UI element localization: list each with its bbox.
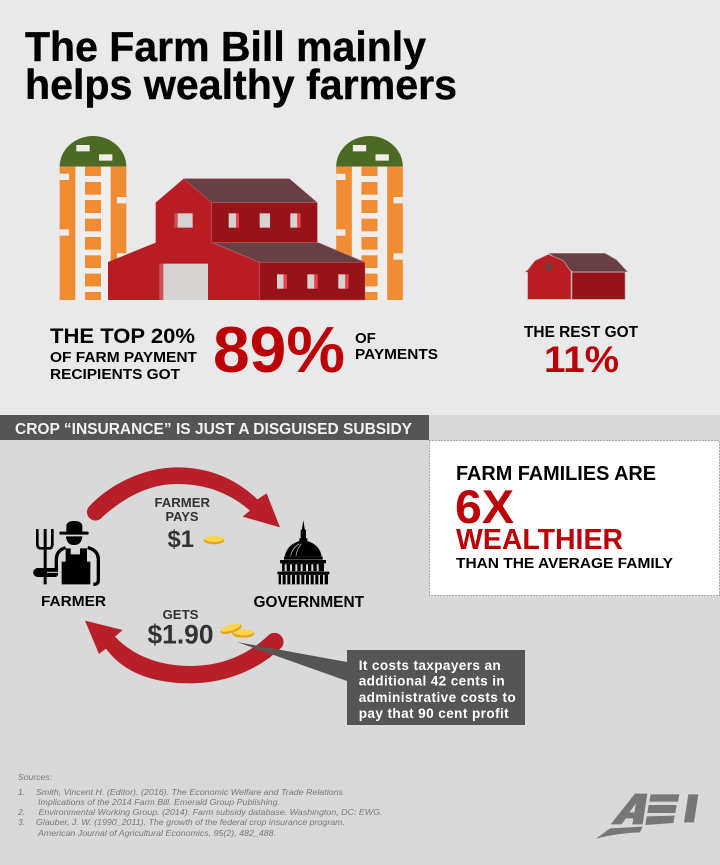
callout: taxpayer administrative costs: It costs taxpayers an <box>359 658 501 673</box>
title: helps wealthy farmers <box>25 61 457 108</box>
icon: farmer <box>33 521 98 584</box>
text: top 20 percent label: RECIPIENTS GOT <box>50 366 181 383</box>
title: The Farm Bill mainly <box>25 23 426 70</box>
text: of payments: PAYMENTS <box>355 346 438 363</box>
callout: taxpayer administrative costs <box>237 642 525 725</box>
logo: AEI <box>596 794 698 839</box>
big number: 89 percent: 89% <box>213 313 345 386</box>
panel: farm families wealth callout: 6X <box>455 481 514 534</box>
text: farmer pays $1: $1 <box>168 526 194 553</box>
text: top 20 percent label: OF FARM PAYMENT <box>50 349 198 366</box>
text: farmer pays $1: FARMER <box>154 495 211 510</box>
callout: taxpayer administrative costs: additional 42 cents in <box>359 674 505 688</box>
text: top 20 percent label: THE TOP 20% <box>50 324 195 348</box>
arrow: farmer pays government <box>87 467 280 527</box>
text: farmer pays $1 <box>154 495 211 553</box>
icon: large farm with silos <box>60 136 403 300</box>
section header band <box>0 415 429 440</box>
panel: farm families wealth callout: WEALTHIER <box>456 524 623 556</box>
icon: small barn <box>525 253 627 299</box>
text: sources: Glauber, J. W. (1990_2011). The growth of the federal crop insurance program. <box>36 817 345 827</box>
panel: farm families wealth callout: FARM FAMILIES ARE <box>456 463 656 485</box>
icon: red barn <box>108 179 365 300</box>
icon: left silo <box>60 136 126 300</box>
label: government: GOVERNMENT <box>254 594 365 611</box>
big number: 11 percent: 11% <box>544 338 619 380</box>
panel: farm families wealth callout <box>430 440 720 596</box>
label: farmer: FARMER <box>41 593 106 610</box>
text: gets $1.90: GETS <box>162 607 199 622</box>
panel: farm families wealth callout: THAN THE AVERAGE FAMILY <box>456 555 673 572</box>
text: gets $1.90: $1.90 <box>148 620 214 650</box>
icon: right silo <box>336 136 403 300</box>
text: sources: 1. <box>18 787 25 797</box>
icon: capitol building <box>277 520 329 584</box>
text: farmer pays $1: PAYS <box>166 509 199 524</box>
text: sources: Sources: <box>18 772 53 782</box>
text: of payments <box>355 330 438 363</box>
text: of payments: OF <box>355 330 376 347</box>
text: sources <box>17 772 382 838</box>
text: sources: Smith, Vincent H. (Editor). (2016). The Economic Welfare and Trade Relations <box>36 787 344 797</box>
icon part: hat and head <box>59 521 89 545</box>
callout: taxpayer administrative costs: pay that 90 cent profit <box>359 706 509 721</box>
icon part: overalls <box>47 548 98 584</box>
icon: two coins <box>219 622 254 638</box>
text: the rest got: THE REST GOT <box>524 324 638 341</box>
text: top 20 percent label <box>50 324 198 383</box>
title <box>25 23 457 108</box>
icon: single coin <box>204 536 224 544</box>
callout: taxpayer administrative costs: administrative costs to <box>359 690 516 705</box>
text: sources: 3. <box>18 817 25 827</box>
arrow: government pays farmer <box>85 621 283 683</box>
section header band: CROP “INSURANCE” IS JUST A DISGUISED SUBSIDY <box>15 421 412 438</box>
text: sources: American Journal of Agricultural Economics, 95(2), 482_488. <box>37 828 276 838</box>
icon part: pitchfork <box>33 529 57 584</box>
text: sources: 2. <box>17 807 25 817</box>
text: sources: Environmental Working Group. (2014). Farm subsidy database. Washington, DC: EWG. <box>38 807 382 817</box>
text: sources: Implications of the 2014 Farm Bill. Emerald Group Publishing. <box>38 797 280 807</box>
